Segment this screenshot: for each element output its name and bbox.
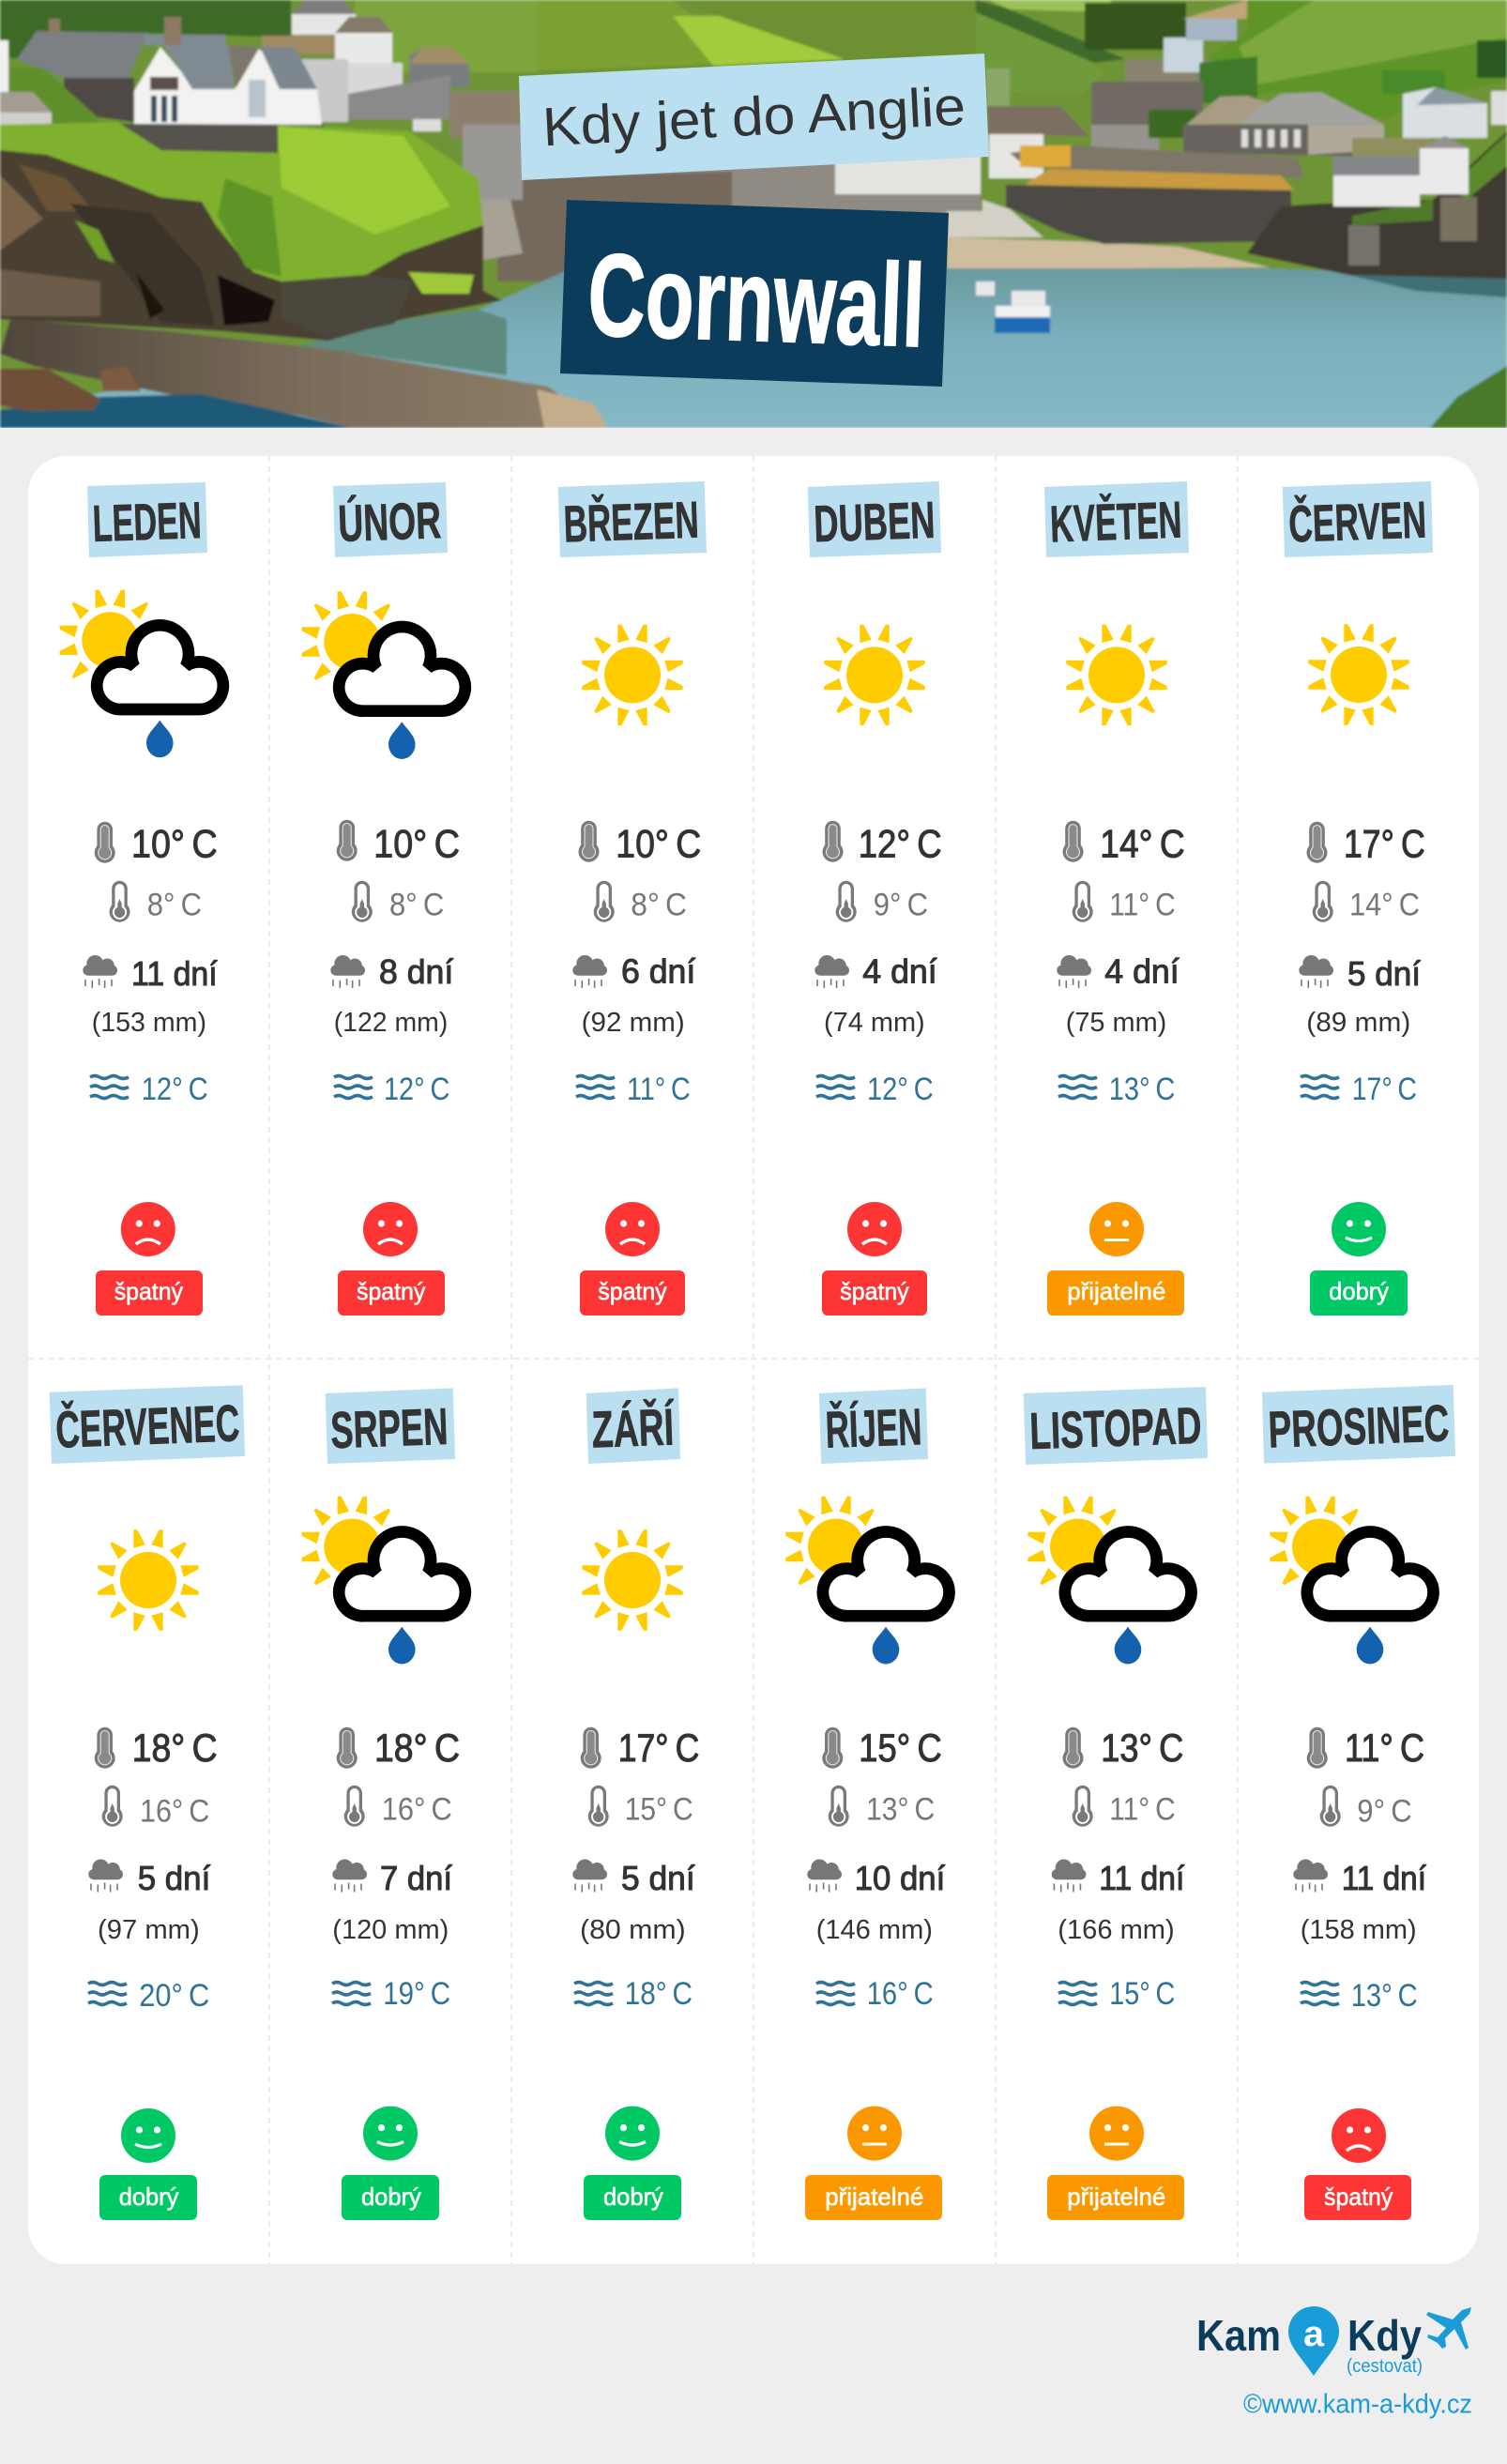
rainy days: 5 dní [1347,954,1421,993]
rating badge [822,1270,927,1316]
rainfall: (166 mm) [1058,1915,1175,1945]
sea temperature: 20° C [139,1978,209,2014]
rainy days: 5 dní [138,1859,210,1897]
min temperature: 8° C [147,888,202,923]
heading: LISTOPAD [1024,1387,1208,1465]
icon: rain cloud [332,1860,367,1892]
icon: sun with cloud and rain [785,1497,950,1665]
heading: BŘEZEN [558,481,707,557]
sea temperature: 19° C [383,1976,450,2012]
max temperature: 13° C [1101,1726,1183,1770]
heading: ÚNOR: ÚNOR [337,491,442,553]
rating badge: špatný [598,1277,667,1305]
sea temperature: 13° C [1109,1072,1175,1107]
icon: sun [1066,625,1167,725]
title banner: Kdy jet do Anglie: Kdy jet do Anglie [541,76,967,158]
icon: thermometer high [337,820,358,861]
icon: thermometer low [1320,1786,1341,1827]
month: ŘÍJEN [785,1388,950,2220]
max temperature: 17° C [1344,822,1425,865]
copyright url: ©www.kam-a-kdy.cz [1243,2390,1472,2420]
icon: sad face [363,1202,418,1256]
heading: PROSINEC [1262,1385,1455,1464]
icon: neutral face [1089,1202,1144,1256]
icon: waves [334,1075,373,1098]
icon: waves [576,1075,615,1098]
heading: ČERVEN [1283,481,1433,557]
rating badge [1047,1270,1184,1316]
icon: waves [816,1982,855,2004]
icon: sun [98,1529,199,1631]
title banner: Cornwall: Cornwall [586,230,927,372]
min temperature: 16° C [382,1792,452,1828]
icon: rain cloud [1293,1860,1328,1892]
rating badge: špatný [357,1277,425,1305]
rainfall: (153 mm) [92,1008,206,1038]
rating badge: přijatelné [1067,1277,1165,1305]
logo text: Kam: Kam [1196,2311,1281,2360]
rainfall: (80 mm) [580,1915,686,1945]
icon: sad face [1332,2108,1386,2163]
icon: rain cloud [88,1860,123,1892]
icon: rain cloud [572,955,607,988]
rainy days: 7 dní [380,1859,452,1897]
icon: sun [582,625,683,725]
rating badge: dobrý [603,2183,663,2211]
heading: ÚNOR [333,482,448,557]
icon: waves [88,1982,127,2004]
logo: Kam a Kdy [1196,2306,1472,2420]
icon: waves [90,1075,129,1098]
sea temperature: 11° C [627,1072,691,1107]
icon: sad face [121,1202,175,1256]
rainy days: 5 dní [621,1859,695,1897]
logo text: a: a [1303,2315,1325,2354]
rating badge [1047,2175,1184,2220]
rainfall: (146 mm) [816,1915,933,1945]
icon: thermometer high [581,1727,601,1769]
icon: waves [332,1982,371,2004]
icon: sun with cloud and rain [60,590,223,757]
rainfall: (97 mm) [98,1915,200,1945]
icon: sad face [847,1202,902,1256]
rainy days: 4 dní [1104,951,1180,991]
heading: LEDEN: LEDEN [92,491,203,553]
icon: happy face [605,2107,660,2161]
min temperature: 13° C [866,1792,935,1828]
sea temperature: 12° C [142,1072,208,1107]
rating badge: přijatelné [825,2183,923,2211]
title banner: Kdy jet do Anglie [519,53,989,180]
rating badge [1304,2175,1411,2220]
sea temperature: 18° C [625,1976,693,2012]
icon: happy face [1332,1202,1386,1256]
icon: map pin [1288,2306,1339,2376]
rating badge: dobrý [119,2183,178,2211]
rating badge [805,2175,942,2220]
icon: thermometer low [352,881,373,922]
heading: KVĚTEN: KVĚTEN [1049,491,1182,553]
icon: neutral face [847,2107,902,2161]
icon: thermometer low [588,1786,609,1827]
rating badge: špatný [1324,2183,1393,2211]
rainfall: (158 mm) [1301,1915,1417,1945]
heading: ZÁŘÍ [586,1388,680,1464]
icon: thermometer low [1073,1786,1093,1827]
icon: thermometer high [95,1727,115,1769]
heading: LISTOPAD: LISTOPAD [1028,1396,1202,1460]
icon: waves [1301,1075,1339,1098]
icon: thermometer high [1307,1727,1328,1769]
sea temperature: 15° C [1109,1976,1175,2012]
rating badge [338,1270,445,1316]
rainy days: 11 dní [1342,1859,1426,1897]
rainy days: 8 dní [379,952,453,991]
max temperature: 10° C [373,822,460,865]
panel: months table [28,456,1479,2264]
icon: waves [574,1982,613,2004]
title banner: Cornwall [560,200,949,387]
month: LISTOPAD [1024,1387,1208,2220]
rating badge [1310,1270,1408,1316]
icon: waves [816,1075,855,1098]
icon: sun with cloud and rain [1028,1497,1192,1665]
icon: happy face [121,2108,175,2163]
month: ÚNOR [302,482,465,1316]
rainfall: (122 mm) [334,1008,448,1038]
sea temperature: 12° C [384,1072,449,1107]
month: SRPEN [302,1388,465,2220]
logo text: cestovat: (cestovat) [1347,2356,1423,2377]
month: DUBEN [808,481,942,1316]
icon: waves [1058,1075,1097,1098]
icon: thermometer high [822,821,843,862]
icon: thermometer low [836,881,857,922]
icon: thermometer low [1073,881,1093,922]
min temperature: 14° C [1349,888,1420,923]
icon: thermometer low [102,1786,123,1827]
month: KVĚTEN [1044,481,1189,1316]
heading: ČERVEN: ČERVEN [1287,490,1427,554]
rainfall: (75 mm) [1066,1008,1166,1038]
heading: SRPEN: SRPEN [329,1397,449,1459]
heading: ŘÍJEN [819,1388,928,1464]
rainy days: 4 dní [862,951,937,991]
month: BŘEZEN [558,481,707,1316]
rainfall: (74 mm) [824,1008,925,1038]
heading: SRPEN [326,1388,455,1464]
icon: sun with cloud and rain [302,1497,465,1665]
logo text: Kdy: Kdy [1347,2311,1422,2360]
icon: rain cloud [83,955,117,988]
icon: sun with cloud and rain [1270,1497,1434,1665]
rating badge: špatný [840,1277,909,1305]
icon: rain cloud [1057,955,1091,988]
rating badge [342,2175,439,2220]
icon: thermometer low [594,881,615,922]
sea temperature: 13° C [1351,1978,1418,2014]
hero photo: Cornwall harbour [0,0,1507,428]
icon: thermometer high [822,1727,843,1769]
icon: sun [582,1529,683,1631]
icon: thermometer low [344,1786,365,1827]
icon: sun [824,625,925,725]
icon: rain cloud [814,955,849,988]
max temperature: 14° C [1100,822,1185,865]
rating badge [96,1270,203,1316]
icon: neutral face [1089,2107,1144,2161]
icon: thermometer low [1313,881,1333,922]
heading: ŘÍJEN: ŘÍJEN [825,1397,922,1459]
max temperature: 17° C [618,1726,699,1770]
min temperature: 11° C [1109,888,1176,923]
min temperature: 15° C [625,1792,693,1828]
sea temperature: 17° C [1352,1072,1417,1107]
icon: rain cloud [1052,1860,1086,1892]
heading: LEDEN [87,482,207,557]
icon: plane [1426,2307,1471,2350]
icon: rain cloud [807,1860,842,1892]
heading: DUBEN [808,481,941,557]
rainy days: 10 dní [855,1859,945,1897]
min temperature: 11° C [1109,1792,1176,1828]
icon: sun [1308,624,1409,725]
max temperature: 10° C [131,822,218,865]
icon: thermometer low [829,1786,849,1827]
icon: sad face [605,1202,660,1256]
month: PROSINEC [1262,1385,1455,2220]
rating badge [99,2175,197,2220]
min temperature: 9° C [1357,1794,1412,1830]
rating badge [580,1270,685,1316]
icon: happy face [363,2107,418,2161]
icon: rain cloud [330,955,365,988]
icon: waves [1058,1982,1097,2004]
month: LEDEN [60,482,223,1316]
heading: BŘEZEN: BŘEZEN [563,491,700,554]
icon: rain cloud [572,1860,607,1892]
rainy days: 6 dní [621,951,695,991]
max temperature: 15° C [859,1726,942,1770]
min temperature: 8° C [631,888,687,923]
icon: thermometer low [109,881,129,922]
icon: sun with cloud and rain [302,591,465,759]
rainfall: (92 mm) [582,1008,685,1038]
icon: thermometer high [337,1727,358,1769]
heading: KVĚTEN [1044,481,1189,557]
heading: ZÁŘÍ: ZÁŘÍ [591,1397,676,1459]
month: ČERVENEC [50,1385,245,2220]
month: ČERVEN [1283,481,1433,1316]
rating badge: dobrý [361,2183,421,2211]
max temperature: 18° C [132,1726,218,1770]
icon: rain cloud [1299,955,1333,988]
rating badge: dobrý [1329,1277,1389,1305]
heading: ČERVENEC: ČERVENEC [54,1393,240,1459]
min temperature: 16° C [140,1794,209,1830]
heading: ČERVENEC [50,1385,245,1464]
max temperature: 18° C [374,1726,460,1770]
min temperature: 9° C [874,888,928,923]
heading: DUBEN: DUBEN [813,491,936,553]
month: ZÁŘÍ [572,1388,699,2220]
icon: waves [1301,1982,1339,2004]
rainy days: 11 dní [1099,1859,1184,1897]
sea temperature: 16° C [867,1976,934,2012]
max temperature: 10° C [616,822,701,865]
rating badge: přijatelné [1067,2183,1165,2211]
sea temperature: 12° C [867,1072,934,1107]
icon: thermometer high [1306,822,1327,863]
max temperature: 12° C [859,822,942,865]
icon: thermometer high [95,822,115,863]
rainfall: (89 mm) [1306,1008,1410,1038]
icon: thermometer high [1062,1727,1083,1769]
icon: thermometer high [1062,821,1083,862]
max temperature: 11° C [1345,1726,1424,1770]
rainy days: 11 dní [131,954,218,993]
rating badge [584,2175,681,2220]
rainfall: (120 mm) [332,1915,449,1945]
icon: thermometer high [578,821,599,862]
rating badge: špatný [114,1277,183,1305]
min temperature: 8° C [389,888,444,923]
